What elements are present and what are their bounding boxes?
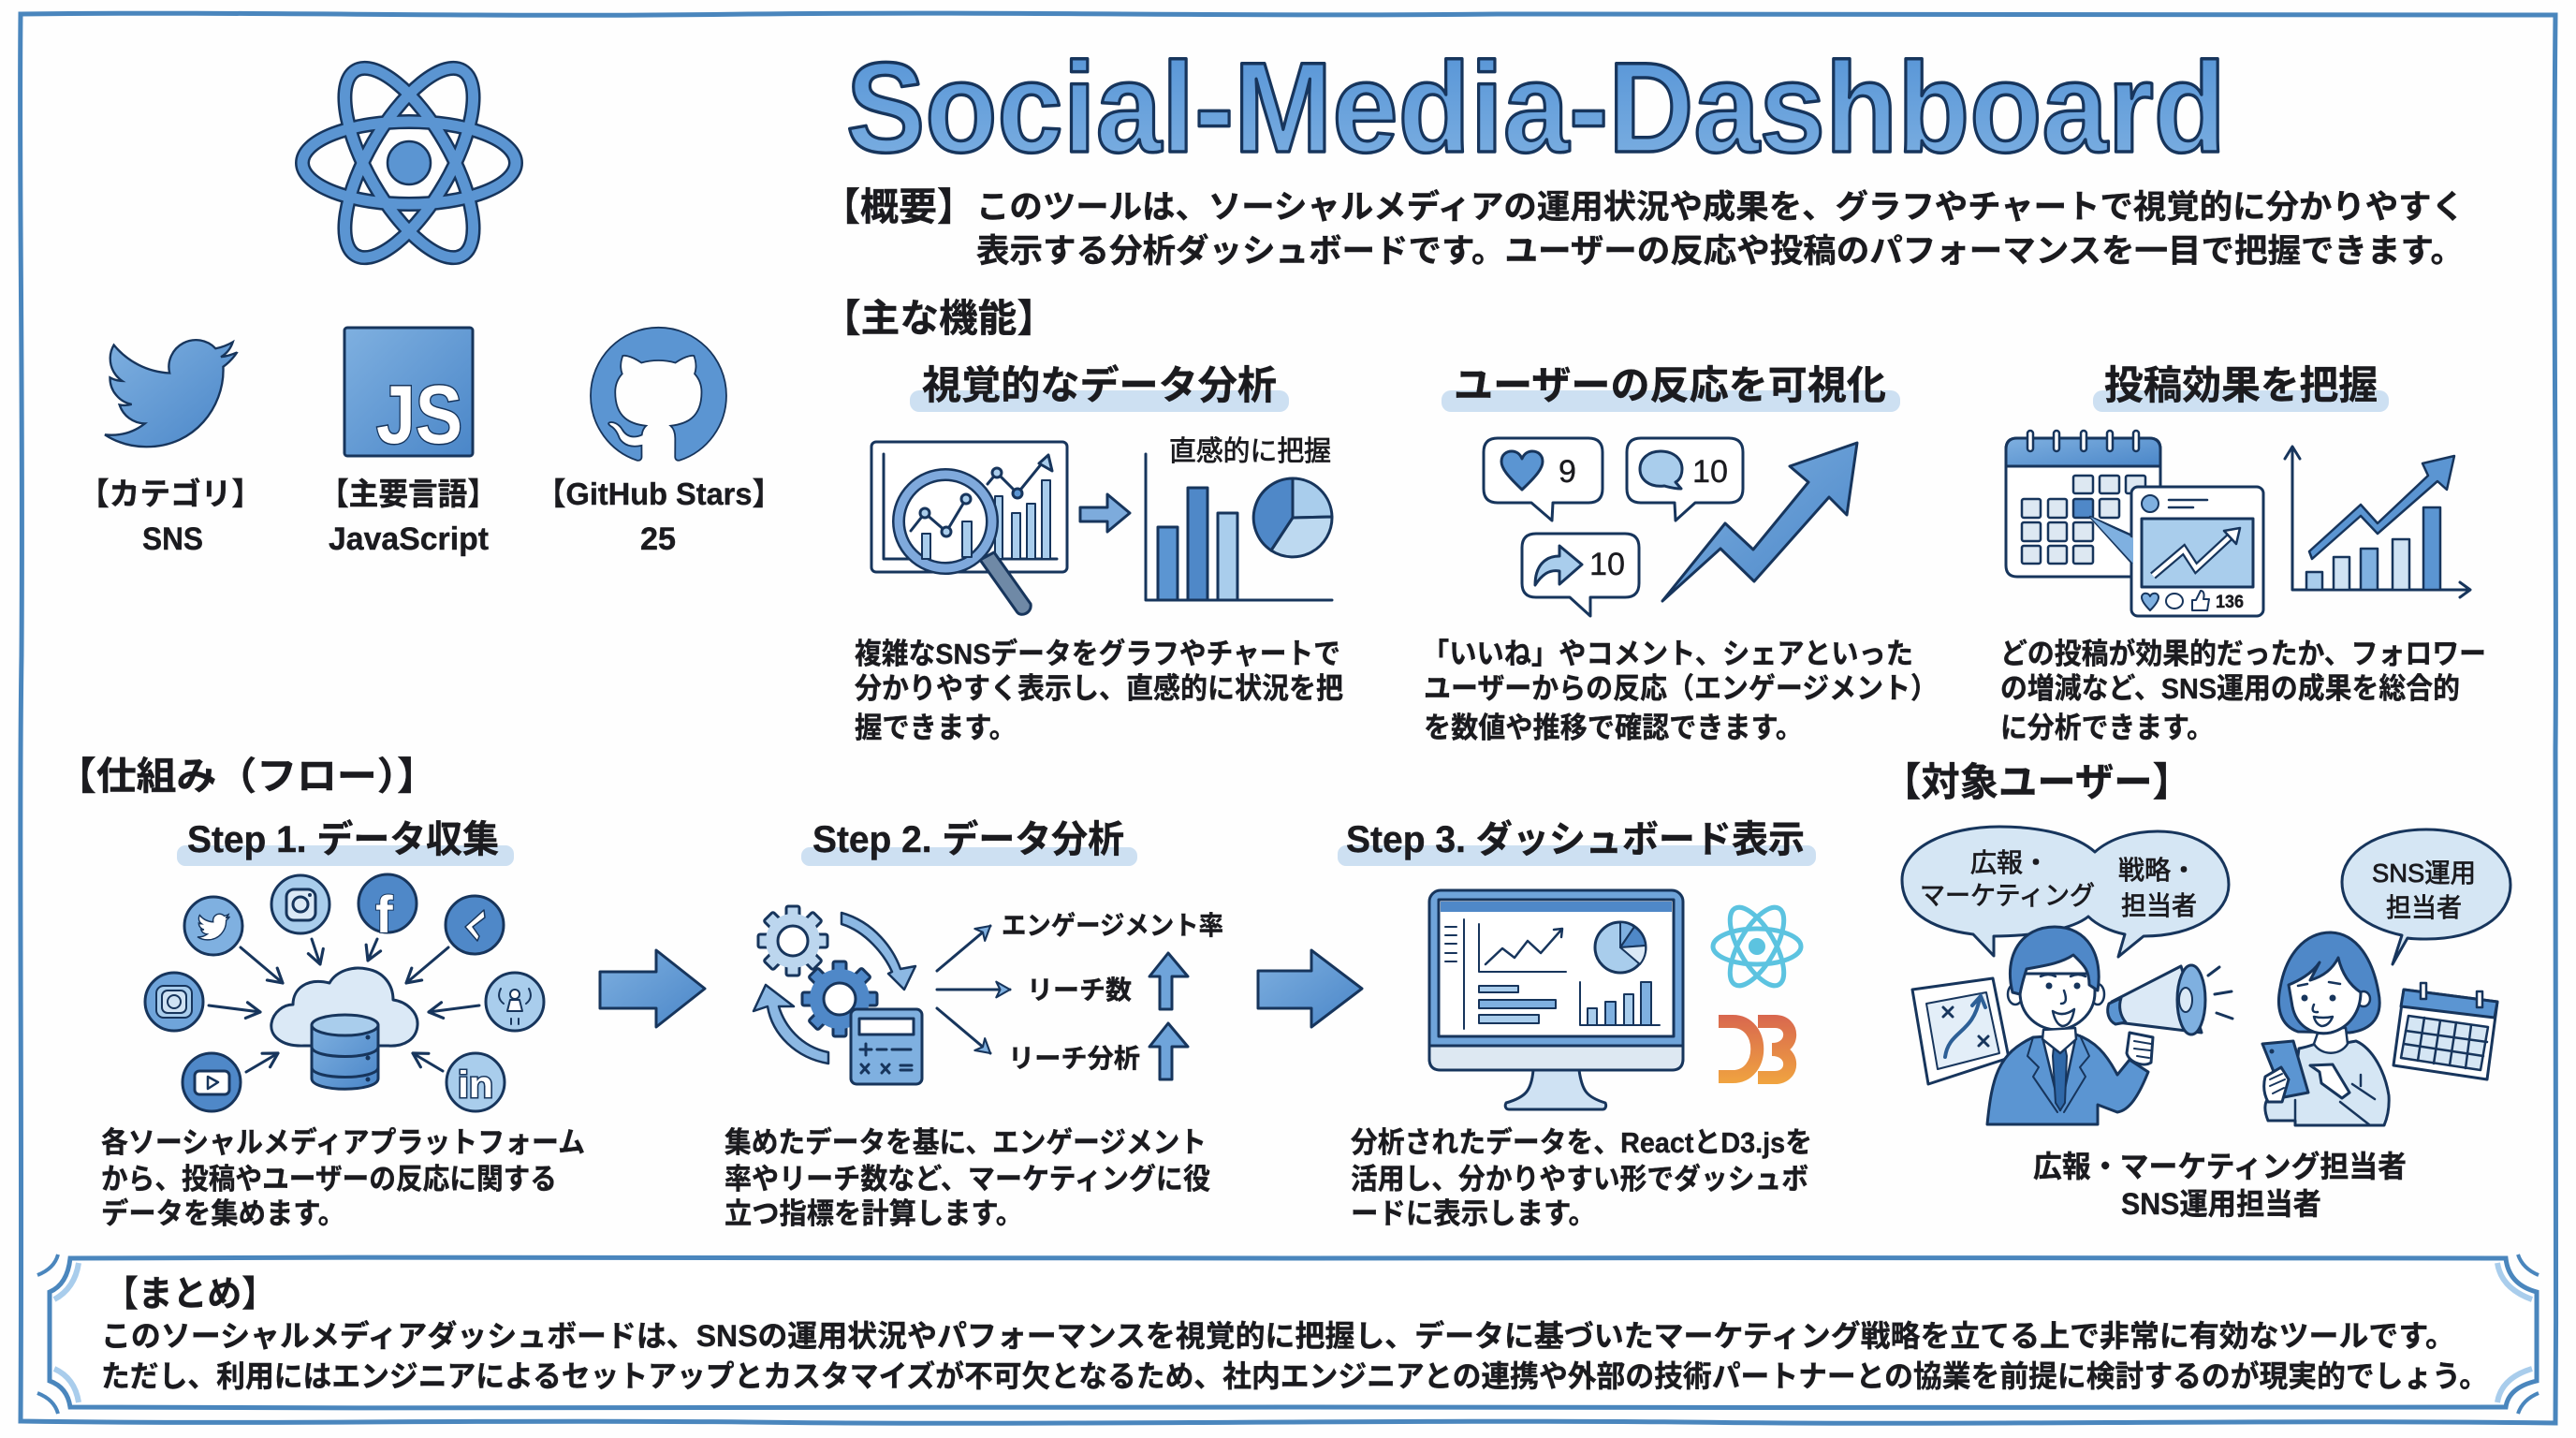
text block: このソーシャルメディアダッシュボードは、SNSの運用状況やパフォーマンスを視覚的に把握し、データに基づいたマーケティング戦略を立てる上で非常に有効なツールです。 — [101, 1319, 2455, 1353]
callout: SNS operator speech bubble: 担当者 — [2386, 893, 2462, 922]
icon: messaging circle — [446, 896, 504, 954]
text block: ただし、利用にはエンジニアによるセットアップとカスタマイズが不可欠となるため、社内エンジニアとの連携や外部の技術パートナーとの協業を前提に検討するのが現実的でしょう。 — [101, 1359, 2488, 1393]
callout: SNS operator speech bubble — [2342, 829, 2510, 964]
icon: wall calendar — [2393, 983, 2497, 1079]
icon: Instagram circle — [271, 875, 329, 933]
icon: calendar — [2006, 431, 2160, 577]
panel: visual data analysis — [855, 363, 1343, 744]
illustration: dashboard with magnifier — [871, 442, 1067, 614]
panel: step 1 data collection — [101, 818, 585, 1230]
heading highlight — [910, 390, 1289, 412]
arrows: sources to cloud — [209, 939, 479, 1072]
callout: marketing speech bubbles: 担当者 — [2121, 891, 2197, 920]
description: 複雑なSNSデータをグラフやチャートで — [855, 638, 1340, 670]
icon: JavaScript badge — [344, 328, 473, 461]
label: reach — [1027, 953, 1188, 1009]
icon: Twitter bird — [105, 340, 237, 447]
heading: 【まとめ】 — [104, 1275, 276, 1314]
callout: marketing speech bubbles — [1902, 827, 2229, 957]
icon: calculator — [851, 1009, 922, 1084]
description: 握できます。 — [855, 712, 1017, 744]
description: 活用し、分かりやすい形でダッシュボ — [1351, 1163, 1808, 1196]
label: target user list: 広報・マーケティング担当者 — [2033, 1150, 2407, 1183]
callout: marketing speech bubbles: 広報・ — [1970, 848, 2049, 877]
title: Social-Media-Dashboard — [846, 37, 2226, 180]
heading: main features: 【主な機能】 — [822, 297, 1056, 340]
label: reach: リーチ数 — [1027, 976, 1132, 1005]
description: 分析されたデータを、ReactとD3.jsを — [1351, 1126, 1812, 1159]
icon: strategy board — [1912, 978, 2009, 1084]
label: category: SNS — [142, 521, 203, 557]
icon: React logo small — [1713, 900, 1801, 993]
heading highlight — [1338, 845, 1816, 866]
text block: overview: 【概要】 — [822, 185, 975, 228]
callout: SNS operator speech bubble: SNS運用 — [2372, 858, 2476, 888]
description: に分析できます。 — [2000, 712, 2214, 744]
icon: LinkedIn circle — [446, 1053, 505, 1111]
icon: D3 logo — [1719, 1021, 1790, 1078]
description: から、投稿やユーザーの反応に関する — [101, 1163, 557, 1196]
description: どの投稿が効果的だったか、フォロワー — [2000, 638, 2486, 670]
panel: visualize user reactions — [1422, 363, 1938, 744]
text block: overview: このツールは、ソーシャルメディアの運用状況や成果を、グラフやチャートで視覚的に分かりやすく — [976, 188, 2465, 226]
description: データを集めます。 — [101, 1197, 345, 1230]
callout: shares: 10 — [1589, 547, 1625, 582]
arrow — [1080, 494, 1130, 532]
heading: ユーザーの反応を可視化 — [1454, 363, 1886, 407]
heading: Step 2. データ分析 — [812, 818, 1124, 860]
heading: how it works: 【仕組み（フロー）】 — [56, 755, 437, 798]
icon: post card — [2090, 487, 2263, 616]
illustration: man with megaphone — [1987, 927, 2205, 1124]
callout: likes: 9 — [1559, 454, 1576, 490]
icon: JavaScript badge: JS — [376, 368, 462, 461]
label: target user list — [2033, 1150, 2407, 1221]
heading: 【対象ユーザー】 — [1882, 760, 2191, 804]
panel: step 2 data analysis — [724, 818, 1223, 1230]
heading: Step 3. ダッシュボード表示 — [1346, 819, 1805, 860]
icon: people circle — [486, 973, 544, 1031]
arrows: process cycle — [754, 913, 915, 1064]
description: 分かりやすく表示し、直感的に状況を把 — [855, 672, 1343, 705]
description: の増減など、SNS運用の成果を総合的 — [2000, 672, 2460, 705]
icon: cloud database — [271, 968, 417, 1089]
icon: camera circle — [145, 973, 203, 1031]
arrow: growth — [1662, 443, 1857, 601]
icon: Twitter circle — [184, 897, 242, 955]
chart: bars and pie — [1146, 436, 1332, 600]
heading highlight — [1442, 390, 1900, 412]
panel: target users — [1882, 760, 2510, 1221]
label: reach analysis: リーチ分析 — [1008, 1044, 1140, 1073]
callout: likes — [1484, 438, 1603, 521]
text block — [101, 1319, 2488, 1393]
callout: comments — [1627, 438, 1743, 521]
callout: marketing speech bubbles: マーケティング — [1920, 881, 2095, 910]
description — [724, 1126, 1210, 1230]
label: reach analysis — [1008, 1023, 1188, 1079]
label: category — [79, 477, 262, 557]
description — [855, 638, 1343, 744]
description: 各ソーシャルメディアプラットフォーム — [101, 1126, 585, 1159]
text block: overview — [822, 185, 2465, 270]
text block: overview: 表示する分析ダッシュボードです。ユーザーの反応や投稿のパフォーマンスを一目で把握できます。 — [976, 232, 2464, 270]
icon: GitHub cat — [591, 328, 726, 461]
label: GitHub stars: 【GitHub Stars】 — [535, 477, 783, 511]
description: 立つ指標を計算します。 — [724, 1197, 1023, 1230]
panel: post effectiveness — [2000, 363, 2486, 744]
heading: 視覚的なデータ分析 — [922, 363, 1277, 407]
illustration: woman with smartphone — [2262, 932, 2389, 1125]
panel: step 3 dashboard display — [1338, 819, 1816, 1230]
label: main language: 【主要言語】 — [319, 477, 497, 511]
heading highlight — [2093, 390, 2389, 412]
icon: Facebook circle — [359, 874, 417, 944]
label: engagement rate: エンゲージメント率 — [1002, 911, 1223, 940]
label: main language — [319, 477, 497, 557]
description: ユーザーからの反応（エンゲージメント） — [1424, 672, 1938, 705]
description — [101, 1126, 585, 1230]
callout: comments: 10 — [1692, 454, 1728, 490]
arrow: step 1 to step 2 — [600, 950, 705, 1027]
arrow: step 2 to step 3 — [1258, 950, 1362, 1027]
chart caption: 直感的に把握 — [1169, 436, 1331, 467]
description — [1422, 638, 1938, 744]
description: 「いいね」やコメント、シェアといった — [1422, 638, 1913, 670]
icon: dark gear — [802, 961, 877, 1036]
icon: monitor dashboard — [1429, 890, 1683, 1109]
callout: shares — [1522, 534, 1639, 616]
description: を数値や推移で確認できます。 — [1424, 712, 1803, 744]
label: GitHub stars — [535, 477, 783, 557]
heading: Step 1. データ収集 — [187, 818, 499, 860]
description: 率やリーチ数など、マーケティングに役 — [724, 1163, 1210, 1196]
panel: summary — [37, 1255, 2539, 1414]
label: target user list: SNS運用担当者 — [2121, 1187, 2321, 1221]
panel: project info — [79, 50, 783, 557]
icon: sound lines — [2208, 967, 2232, 1019]
label: main language: JavaScript — [329, 521, 489, 557]
icon: video circle — [183, 1053, 241, 1111]
description — [2000, 638, 2486, 744]
description — [1351, 1126, 1812, 1230]
label: GitHub stars: 25 — [640, 521, 676, 557]
description: ードに表示します。 — [1351, 1197, 1596, 1230]
heading highlight — [177, 845, 514, 866]
label: category: 【カテゴリ】 — [79, 477, 262, 511]
chart: growth — [2285, 447, 2470, 597]
icon: Facebook circle: f — [375, 885, 393, 944]
arrows: metrics — [937, 926, 1010, 1053]
summary box frame — [37, 1255, 2539, 1414]
icon: post card: 136 — [2216, 593, 2244, 612]
heading: 投稿効果を把握 — [2104, 363, 2378, 407]
callout: marketing speech bubbles: 戦略・ — [2118, 856, 2197, 885]
icon: React logo — [302, 50, 516, 276]
icon: light gear — [758, 906, 827, 976]
icon: LinkedIn circle: in — [458, 1064, 493, 1106]
description: 集めたデータを基に、エンゲージメント — [724, 1126, 1207, 1159]
heading highlight — [801, 847, 1137, 866]
